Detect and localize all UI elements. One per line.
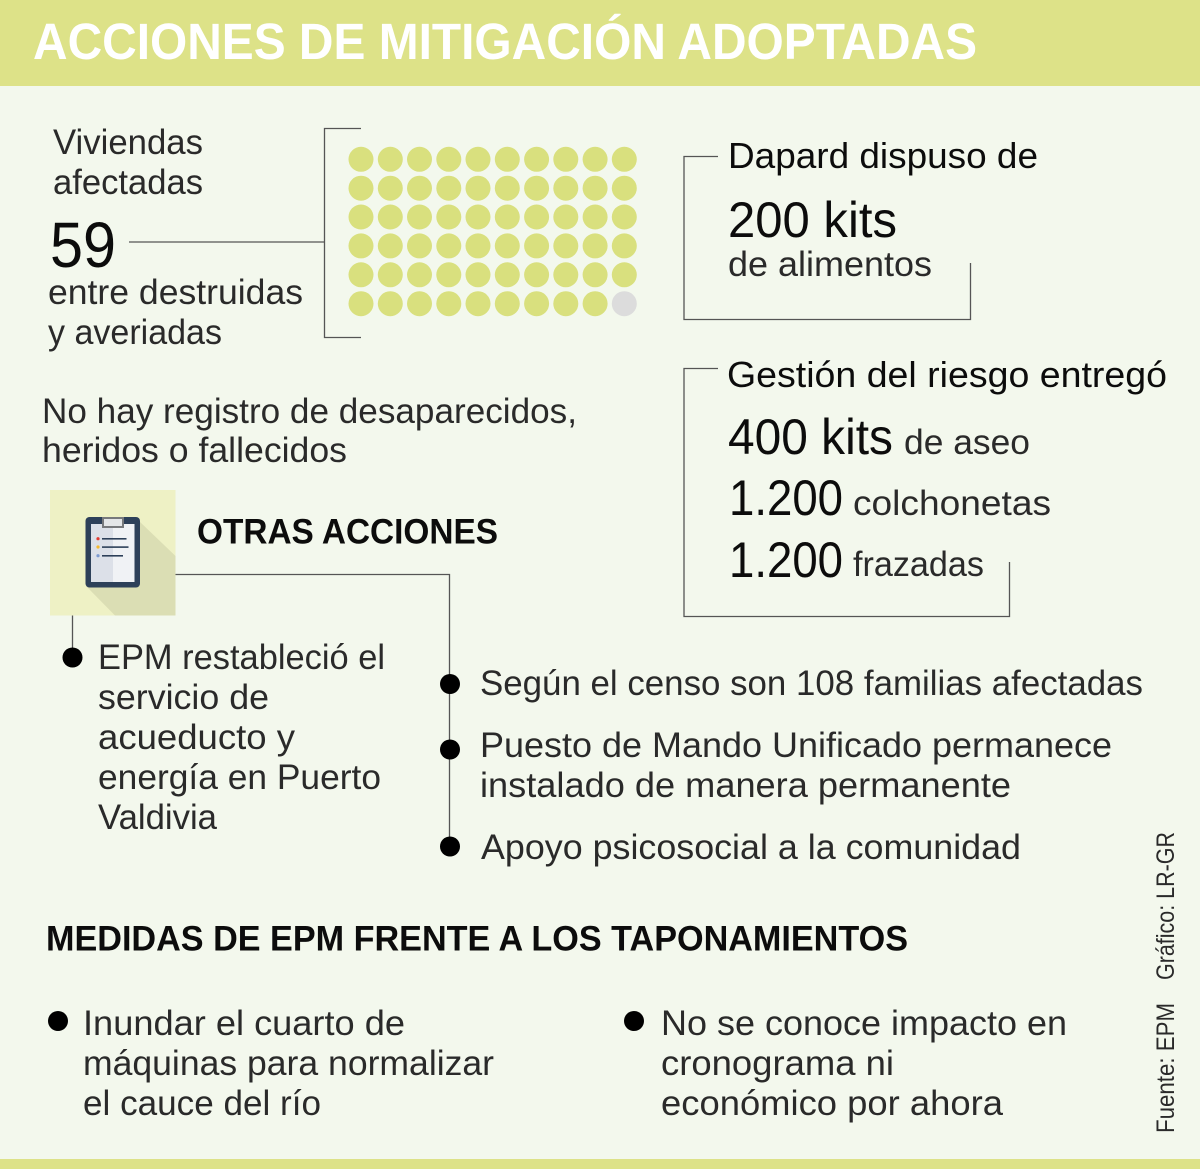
item: 1.200 colchonetas: 1.200 <box>729 470 843 526</box>
heading: otras acciones: OTRAS ACCIONES <box>197 512 498 552</box>
item: 400 kits de aseo: 400 kits <box>728 409 893 465</box>
title banner: ACCIONES DE MITIGACIÓN ADOPTADAS <box>33 13 977 70</box>
heading: dapard dispuso de: Dapard dispuso de <box>728 135 1038 176</box>
bullet: EPM restablecio: acueducto y <box>98 718 296 757</box>
panel: viviendas afectadas <box>48 123 637 352</box>
heading: gestion del riesgo entrego: Gestión del riesgo entregó <box>727 354 1167 395</box>
number: 200 kits: 200 kits <box>728 192 897 248</box>
bracket: gestion del riesgo <box>684 368 1010 616</box>
connector lines: otras acciones <box>72 574 450 846</box>
bracket connector <box>129 128 361 338</box>
bullet: inundar <box>48 1004 494 1123</box>
bullet: censo: Según el censo son 108 familias afectadas <box>480 664 1143 703</box>
bullet: inundar: Inundar el cuarto de <box>83 1004 405 1043</box>
item: 1.200 frazadas: frazadas <box>853 545 984 584</box>
text: viviendas afectadas label: afectadas <box>53 163 203 202</box>
heading: medidas de EPM: MEDIDAS DE EPM FRENTE A LOS TAPONAMIENTOS <box>46 920 908 958</box>
footer band <box>0 1159 1200 1169</box>
item: 1.200 frazadas: 1.200 <box>729 532 843 588</box>
item: 1.200 colchonetas: colchonetas <box>853 484 1051 523</box>
bullet: no se conoce impacto: cronograma ni <box>661 1044 894 1083</box>
text block: no hay registro: heridos o fallecidos <box>42 431 347 470</box>
text: entre destruidas y averiadas: entre destruidas <box>48 273 303 312</box>
bullet: no se conoce impacto: No se conoce impacto en <box>661 1004 1067 1043</box>
bullet: inundar: máquinas para normalizar <box>83 1044 494 1083</box>
text: viviendas afectadas label <box>53 123 203 202</box>
text: de alimentos: de alimentos <box>728 245 932 284</box>
text block: no hay registro: No hay registro de desaparecidos, <box>42 392 577 431</box>
item: 400 kits de aseo <box>728 409 1030 465</box>
number: 59: 59 <box>50 209 116 281</box>
bullet: apoyo psicosocial: Apoyo psicosocial a la comunidad <box>481 828 1021 867</box>
icon: clipboard <box>50 490 176 616</box>
item: 1.200 colchonetas <box>729 470 1051 526</box>
credit: grafico: Gráfico: LR-GR <box>1152 832 1180 980</box>
bullet: puesto de mando: Puesto de Mando Unificado permanece <box>480 726 1112 765</box>
title banner <box>0 0 1200 86</box>
item: 400 kits de aseo: de aseo <box>904 423 1030 462</box>
text block: no hay registro <box>42 392 577 470</box>
text: viviendas afectadas label: Viviendas <box>53 123 203 162</box>
bracket: dapard <box>684 156 970 320</box>
text: entre destruidas y averiadas: y averiadas <box>48 313 222 352</box>
bullet: puesto de mando: instalado de manera permanente <box>480 766 1011 805</box>
bullet: no se conoce impacto: económico por ahora <box>661 1084 1004 1123</box>
bullet: puesto de mando <box>440 726 1112 805</box>
bullet: EPM restablecio: Valdivia <box>98 798 218 837</box>
bullet: EPM restablecio: servicio de <box>98 678 269 717</box>
bullet: EPM restablecio <box>62 638 385 837</box>
item: 1.200 frazadas <box>729 532 984 588</box>
bullet: inundar: el cauce del río <box>83 1084 321 1123</box>
panel: dapard <box>684 135 1038 320</box>
bullet: EPM restablecio: energía en Puerto <box>98 758 381 797</box>
credit: fuente: Fuente: EPM <box>1152 1003 1180 1133</box>
dot chart: 59 of 60 houses <box>348 147 637 316</box>
bullet: EPM restablecio: EPM restableció el <box>98 638 385 677</box>
bullet: no se conoce impacto <box>624 1004 1067 1123</box>
text: entre destruidas y averiadas <box>48 273 303 352</box>
panel: gestion del riesgo <box>684 354 1167 616</box>
